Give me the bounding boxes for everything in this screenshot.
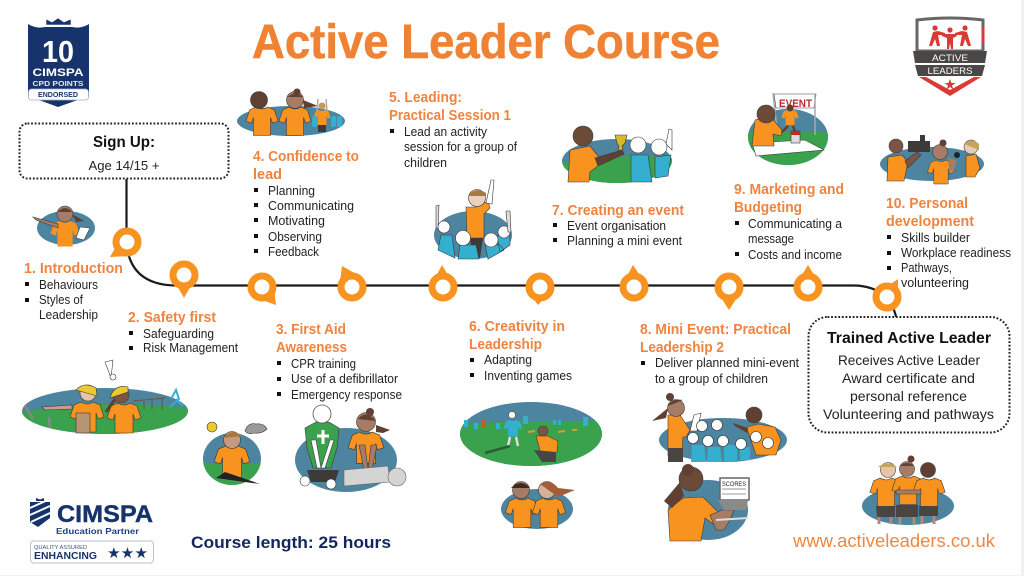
step 8: mini event practical leadership 2: Leadership 2 — [640, 340, 724, 356]
illustration: confidence two leaders — [237, 88, 345, 136]
illustration: leading children — [434, 180, 512, 259]
step 5: leading practical session 1 — [389, 90, 517, 170]
box: sign up: Sign Up: — [93, 134, 155, 151]
badge: quality assured enhancing: QUALITY ASSURED — [34, 545, 87, 551]
step 9: marketing and budgeting — [734, 182, 844, 262]
badge: CIMSPA 10 CPD points — [28, 18, 89, 107]
box: sign up: Age 14/15 + — [88, 158, 160, 173]
illustration: personal development camera and microphone — [880, 135, 984, 184]
illustration: first aid CPR — [295, 405, 406, 492]
illustration: three trained leaders — [862, 456, 954, 525]
badge: CIMSPA 10 CPD points: CPD POINTS — [32, 79, 84, 88]
step 6: creativity in leadership: Adapting — [484, 353, 532, 367]
marker 8 — [718, 276, 740, 310]
marker 7 — [623, 265, 645, 298]
step 10: personal development: 10. Personal — [886, 196, 968, 212]
step 4: confidence to lead: 4. Confidence to — [253, 149, 359, 165]
logo: CIMSPA education partner: CIMSPA — [57, 501, 153, 528]
step 10: personal development: volunteering — [901, 276, 969, 290]
step 4: confidence to lead: Feedback — [268, 245, 320, 259]
illustration: leader with laptop scores — [664, 464, 749, 541]
step 8: mini event practical leadership 2: 8. Mini Event: Practical — [640, 322, 791, 338]
marker 9 — [797, 265, 819, 298]
step 1: introduction: Behaviours — [39, 278, 98, 292]
marker 2 — [173, 264, 195, 298]
step 4: confidence to lead — [253, 149, 359, 259]
marker 5 — [432, 265, 454, 298]
box: trained active leader — [808, 317, 1010, 432]
badge: quality assured enhancing — [30, 541, 154, 563]
badge: CIMSPA 10 CPD points: CIMSPA — [32, 67, 84, 79]
illustration: mini event teacher with children — [652, 393, 787, 462]
logo: CIMSPA education partner — [30, 498, 153, 536]
step 8: mini event practical leadership 2 — [640, 322, 800, 386]
step 6: creativity in leadership: Inventing games — [484, 369, 572, 383]
website: www.activeleaders.co.uk — [792, 531, 996, 551]
step 9: marketing and budgeting: Costs and income — [748, 248, 842, 262]
illustration: event marketing banner: EVENT — [779, 98, 812, 110]
box: trained active leader: Receives Active Leader — [838, 352, 980, 368]
step 4: confidence to lead: Observing — [268, 230, 322, 244]
badge: Active Leaders logo: ACTIVE — [932, 53, 968, 64]
course length: Course length: 25 hours — [191, 533, 391, 552]
logo: CIMSPA education partner: Education Partner — [56, 526, 140, 536]
step 10: personal development: development — [886, 214, 974, 230]
illustration: safety first hard hats — [22, 360, 189, 436]
step 9: marketing and budgeting: Budgeting — [734, 200, 802, 216]
step 1: introduction — [24, 261, 123, 322]
step 1: introduction: Leadership — [39, 308, 98, 322]
step 7: creating an event: 7. Creating an event — [552, 203, 684, 219]
step 9: marketing and budgeting: Communicating a — [748, 217, 842, 231]
marker 4 — [340, 266, 363, 298]
step 4: confidence to lead: Motivating — [268, 214, 325, 228]
badge: Active Leaders logo — [913, 18, 987, 96]
step 6: creativity in leadership: Leadership — [469, 337, 542, 353]
step 4: confidence to lead: lead — [253, 167, 282, 183]
step 6: creativity in leadership: 6. Creativity in — [469, 319, 565, 335]
illustration: event marketing banner — [748, 93, 828, 166]
marker 1 — [110, 231, 138, 257]
step 3: first aid awareness: Emergency response — [291, 388, 402, 402]
step 5: leading practical session 1: 5. Leading: — [389, 90, 462, 106]
step 2: safety first: Safeguarding — [143, 327, 214, 341]
step 3: first aid awareness: 3. First Aid — [276, 322, 346, 338]
box: trained active leader: Volunteering and pathways — [823, 406, 994, 422]
badge: Active Leaders logo: LEADERS — [928, 66, 972, 77]
step 7: creating an event: Event organisation — [567, 219, 666, 233]
illustration: introduction leader pointing — [33, 206, 95, 246]
step 2: safety first — [128, 310, 238, 355]
step 4: confidence to lead: Planning — [268, 184, 315, 198]
marker 6 — [529, 276, 551, 305]
page edge — [1021, 0, 1024, 576]
step 10: personal development: Pathways, — [901, 261, 952, 275]
marker 3 — [251, 276, 276, 305]
step 5: leading practical session 1: Lead an activity — [404, 125, 488, 139]
bottom edge — [0, 575, 1024, 576]
step 4: confidence to lead: Communicating — [268, 199, 354, 213]
badge: CIMSPA 10 CPD points: ENDORSED — [38, 92, 78, 99]
step 6: creativity in leadership — [469, 319, 572, 383]
step 8: mini event practical leadership 2: to a group of children — [655, 372, 768, 386]
step 5: leading practical session 1: session for a group of — [404, 140, 517, 154]
step 3: first aid awareness: Awareness — [276, 340, 347, 356]
step 7: creating an event: Planning a mini event — [567, 234, 682, 248]
box: trained active leader: Award certificate and — [842, 370, 975, 386]
box: trained active leader: personal reference — [850, 388, 967, 404]
badge: quality assured enhancing: ENHANCING — [34, 550, 97, 562]
step 5: leading practical session 1: Practical Session 1 — [389, 108, 511, 124]
badge: CIMSPA 10 CPD points: 10 — [42, 34, 74, 69]
step 9: marketing and budgeting: message — [748, 232, 794, 246]
illustration: creating an event trophy — [562, 126, 672, 184]
step 10: personal development — [886, 196, 1011, 290]
box: trained active leader: Trained Active Leader — [827, 330, 991, 347]
illustration: creativity field game — [460, 402, 602, 468]
step 10: personal development: Workplace readiness — [901, 246, 1011, 260]
title: Active Leader Course — [252, 16, 720, 69]
step 10: personal development: Skills builder — [901, 231, 970, 245]
step 2: safety first: 2. Safety first — [128, 310, 216, 326]
step 1: introduction: 1. Introduction — [24, 261, 123, 277]
step 3: first aid awareness: CPR training — [291, 357, 356, 371]
step 1: introduction: Styles of — [39, 293, 83, 307]
timeline path — [126, 179, 898, 325]
step 2: safety first: Risk Management — [143, 341, 238, 355]
marker 10 — [876, 279, 898, 308]
badge: quality assured enhancing: ★★★ — [107, 544, 148, 562]
step 7: creating an event — [552, 203, 684, 248]
step 3: first aid awareness — [276, 322, 402, 402]
step 5: leading practical session 1: children — [404, 156, 447, 170]
step 8: mini event practical leadership 2: Deliver planned mini-event — [655, 356, 800, 370]
illustration: person with weather — [203, 422, 267, 485]
step 9: marketing and budgeting: 9. Marketing and — [734, 182, 844, 198]
illustration: two friends — [501, 482, 575, 529]
box: sign up — [20, 124, 228, 178]
illustration: leader with laptop scores: SCORES — [722, 482, 746, 488]
step 3: first aid awareness: Use of a defibrillator — [291, 372, 398, 386]
